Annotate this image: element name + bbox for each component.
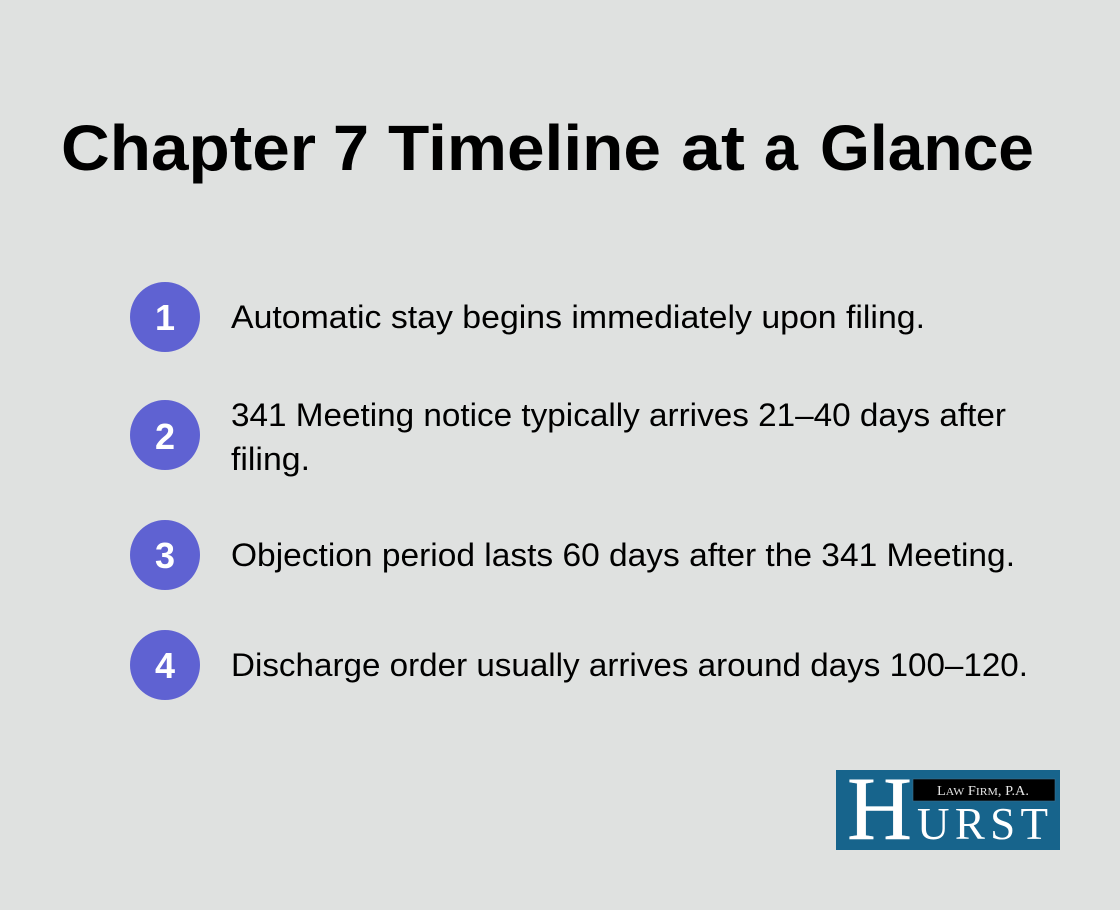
logo: Hurst Law Firm: H (847, 760, 912, 859)
title: Timeline (388, 112, 661, 184)
step 3 text: Objection period lasts 60 days after the 341 Meeting. (231, 537, 1015, 573)
step 3 badge: 3 (155, 535, 175, 576)
step 2 text (231, 397, 1006, 477)
title: Glance (820, 112, 1034, 184)
step 2 text: 341 Meeting notice typically arrives 21–40 days after (231, 397, 1006, 433)
step 1 badge: 1 (155, 297, 175, 338)
logo: Hurst Law Firm: URST (917, 799, 1048, 849)
timeline list (130, 282, 1028, 700)
title (61, 112, 1034, 184)
title: Chapter (61, 112, 316, 184)
step 2 badge (130, 400, 200, 470)
step 2 text: filing. (231, 441, 310, 477)
step 4 badge: 4 (155, 645, 175, 686)
title: a (764, 112, 798, 184)
step 1 text: Automatic stay begins immediately upon filing. (231, 299, 925, 335)
logo: Hurst Law Firm (836, 760, 1060, 859)
step 3 badge (130, 520, 200, 590)
step 1 badge (130, 282, 200, 352)
title: 7 (333, 112, 369, 184)
step 1 (130, 282, 925, 352)
step 3 (130, 520, 1015, 590)
step 2 (130, 397, 1006, 477)
step 4 (130, 630, 1028, 700)
step 4 text: Discharge order usually arrives around days 100–120. (231, 647, 1028, 683)
title: at (681, 112, 745, 184)
step 4 badge (130, 630, 200, 700)
step 2 badge: 2 (155, 416, 175, 457)
logo: Hurst Law Firm: LAW FIRM, P.A. (937, 783, 1029, 798)
